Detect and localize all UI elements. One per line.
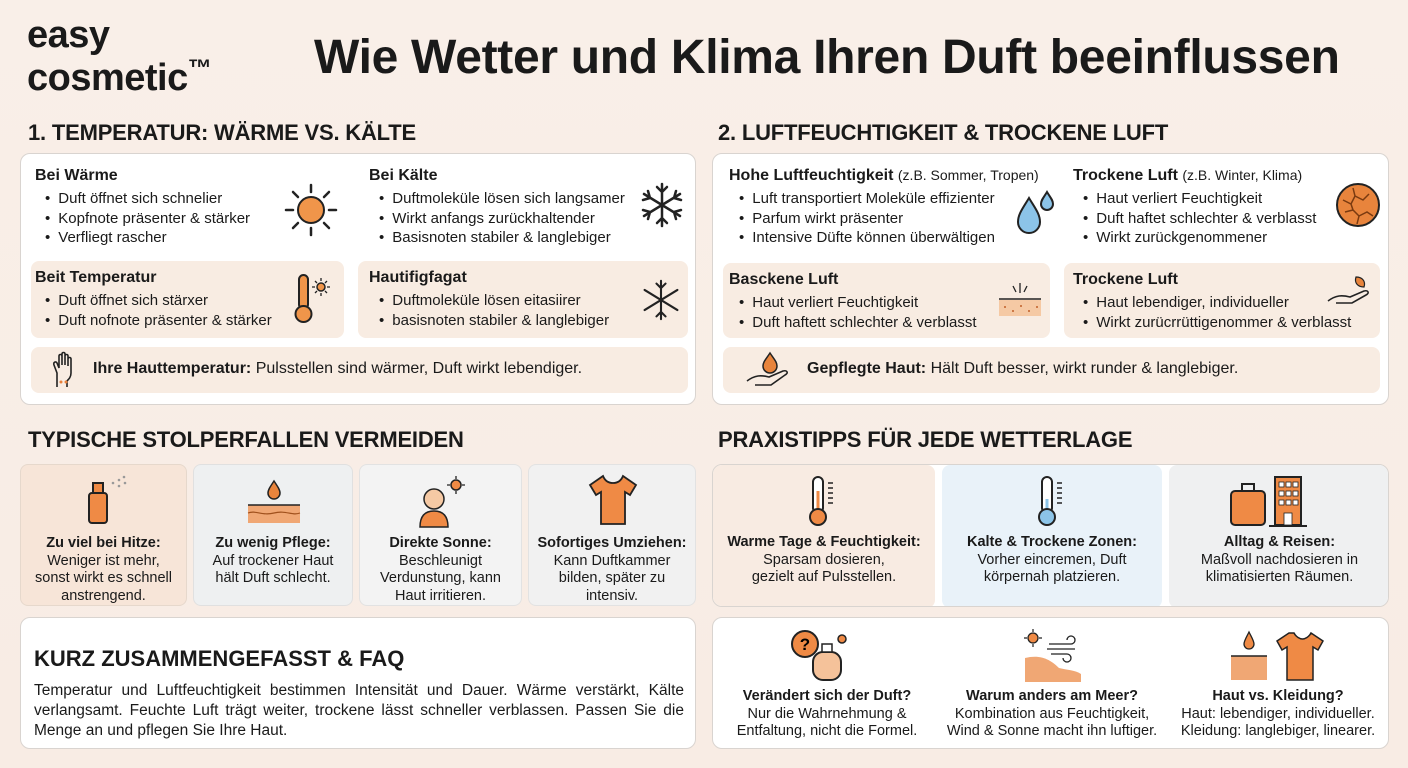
icon: spray: [88, 476, 126, 524]
faq: haut kleidung: Haut vs. Kleidung?: [1212, 688, 1344, 704]
faq: haut kleidung: Kleidung: langlebiger, linearer.: [1181, 723, 1375, 739]
card: kalte zonen: Vorher eincremen, Duft: [977, 552, 1127, 568]
faq: haut kleidung: [1181, 630, 1375, 739]
text: bei kälte: [369, 167, 625, 246]
card: alltag: Maßvoll nachdosieren in: [1201, 552, 1358, 568]
heading: luftfeuchtigkeit: 2. LUFTFEUCHTIGKEIT & TROCKENE LUFT: [718, 120, 1168, 145]
text: bei kälte: Basisnoten stabiler & langlebiger: [392, 229, 611, 246]
title: Wie Wetter und Klima Ihren Duft beeinflussen: [314, 31, 1340, 84]
panel: luftfeuchtigkeit: [712, 153, 1389, 405]
sub: basckene luft: Haut verliert Feuchtigkeit: [752, 294, 918, 311]
card: umziehen: bilden, später zu: [559, 570, 665, 586]
text: bei wärme: Kopfnote präsenter & stärker: [58, 210, 250, 226]
card: kalte zonen: Kalte & Trockene Zonen:: [967, 534, 1137, 550]
heading: stolperfallen: TYPISCHE STOLPERFALLEN VERMEIDEN: [28, 427, 464, 452]
card: sonne: Haut irritieren.: [395, 588, 486, 604]
text: hohe luftfeuchtigkeit: Luft transportiert Moleküle effizienter: [752, 190, 995, 207]
panel: praxistipps: [712, 464, 1389, 607]
text: hohe luftfeuchtigkeit: Hohe Luftfeuchtigkeit (z.B. Sommer, Tropen): [729, 167, 1039, 184]
card: sonne: Beschleunigt: [399, 552, 482, 568]
icon: sun: [284, 184, 338, 236]
sub: trockene luft 2: [1064, 263, 1380, 338]
card: kalte zonen: körpernah platzieren.: [984, 569, 1120, 585]
text: summary: Temperatur und Luftfeuchtigkeit bestimmen Intensität und Dauer. Wärme verstärkt, Kälte verlangsamt. Feuchte Luft trägt weiter, trockene lässt schneller verblassen. Passen Sie die Menge an und pflegen Sie Ihre Haut.: [34, 682, 684, 739]
card: hitze: [20, 464, 187, 606]
text: hohe luftfeuchtigkeit: Parfum wirkt präsenter: [752, 210, 903, 226]
card: kalte zonen: [942, 465, 1162, 608]
icon: shirt: [588, 474, 638, 525]
card: sonne: Direkte Sonne:: [389, 535, 492, 551]
card: warme tage: gezielt auf Pulsstellen.: [752, 569, 896, 585]
icon: hand drop: [746, 352, 788, 386]
text: bei wärme: [35, 167, 250, 246]
card: hitze: Weniger ist mehr,: [47, 552, 160, 568]
sub: hautifigfagat: basisnoten stabiler & langlebiger: [392, 312, 609, 328]
icon: drops: [1017, 190, 1054, 234]
panel: faq text: [20, 617, 696, 749]
text: bei kälte: Duftmoleküle lösen sich langsamer: [392, 190, 625, 207]
heading: temperatur: 1. TEMPERATUR: WÄRME VS. KÄLTE: [28, 120, 416, 145]
card: sonne: Verdunstung, kann: [380, 570, 501, 586]
faq: meer: [947, 629, 1157, 739]
sub: beit temperatur: Beit Temperatur: [35, 269, 157, 286]
icon: question perfume: ?: [800, 635, 810, 654]
card: umziehen: intensiv.: [586, 588, 638, 604]
icon: snowflake: [644, 280, 678, 320]
heading: praxistipps: PRAXISTIPPS FÜR JEDE WETTERLAGE: [718, 427, 1132, 452]
text: hohe luftfeuchtigkeit: [729, 167, 1039, 246]
card: umziehen: Kann Duftkammer: [554, 552, 670, 568]
callout: hauttemperatur: Ihre Hauttemperatur: Pulsstellen sind wärmer, Duft wirkt lebendiger.: [93, 360, 582, 377]
text: bei kälte: Bei Kälte: [369, 167, 437, 184]
card: umziehen: [528, 464, 696, 606]
panel: stolperfallen: [20, 464, 696, 606]
callout: gepflegte haut: [723, 347, 1380, 393]
sub: basckene luft: Basckene Luft: [729, 271, 838, 288]
faq: duft: Entfaltung, nicht die Formel.: [737, 723, 917, 739]
sub: hautifigfagat: Duftmoleküle lösen eitasiirer: [392, 292, 581, 309]
sub: beit temperatur: [31, 261, 344, 338]
card: hitze: sonst wirkt es schnell: [35, 570, 172, 586]
sub: trockene luft 2: Wirkt zurücrrüttigenommer & verblasst: [1096, 314, 1351, 330]
icon: skin: [999, 283, 1041, 316]
text: hohe luftfeuchtigkeit: Intensive Düfte können überwältigen: [752, 229, 995, 246]
icon: hand: [52, 352, 72, 387]
icon: dry earth: [1336, 183, 1380, 227]
text: bei wärme: Bei Wärme: [35, 167, 118, 184]
text: bei kälte: Wirkt anfangs zurückhaltender: [392, 210, 595, 226]
icon: hand leaf: [1328, 276, 1369, 304]
icon: question perfume: [791, 630, 847, 681]
faq: duft: Verändert sich der Duft?: [743, 688, 911, 704]
text: trockene luft: Haut verliert Feuchtigkeit: [1096, 190, 1262, 207]
card: umziehen: Sofortiges Umziehen:: [537, 535, 687, 551]
card: hitze: Zu viel bei Hitze:: [46, 535, 161, 551]
faq: meer: Warum anders am Meer?: [966, 688, 1138, 704]
faq: meer: Kombination aus Feuchtigkeit,: [955, 706, 1149, 722]
callout: hauttemperatur: [31, 347, 688, 393]
logo: [27, 14, 211, 99]
card: sonne: [359, 464, 522, 606]
faq: duft: Nur die Wahrnehmung &: [747, 706, 907, 722]
sub: trockene luft 2: Trockene Luft: [1073, 271, 1178, 288]
sub: beit temperatur: Duft nofnote präsenter & stärker: [58, 312, 272, 328]
card: alltag: [1169, 465, 1390, 608]
sub: hautifigfagat: Hautifigfagat: [369, 269, 467, 286]
icon: beach wind: [1024, 629, 1081, 682]
sub: basckene luft: Duft haftett schlechter & verblasst: [752, 314, 977, 330]
card: pflege: Zu wenig Pflege:: [215, 535, 331, 551]
heading: kurz zusammengefasst: KURZ ZUSAMMENGEFASST & FAQ: [34, 646, 404, 671]
icon: skin shirt: [1231, 630, 1324, 681]
text: trockene luft: Duft haftet schlechter & verblasst: [1096, 210, 1316, 226]
faq: haut kleidung: Haut: lebendiger, individueller.: [1181, 706, 1375, 722]
icon: thermometer warm: [809, 476, 833, 526]
text: trockene luft: Trockene Luft (z.B. Winter, Klima): [1073, 167, 1302, 184]
panel: faq icons: [712, 617, 1389, 749]
card: pflege: Auf trockener Haut: [213, 552, 333, 568]
card: warme tage: [713, 465, 935, 608]
logo: easy: [27, 14, 110, 56]
text: bei wärme: Duft öffnet sich schnelier: [58, 190, 222, 207]
icon: person sun: [419, 476, 465, 528]
text: trockene luft: Wirkt zurückgenommener: [1096, 229, 1267, 246]
text: bei wärme: Verfliegt rascher: [58, 229, 167, 246]
faq: duft: [737, 630, 917, 739]
sub: hautifigfagat: [358, 261, 688, 338]
card: warme tage: Sparsam dosieren,: [763, 552, 885, 568]
sub: beit temperatur: Duft öffnet sich stärxer: [58, 292, 208, 309]
icon: thermometer: [294, 274, 330, 323]
card: pflege: hält Duft schlecht.: [215, 570, 331, 586]
logo: cosmetic™: [27, 55, 211, 99]
sub: basckene luft: [723, 263, 1050, 338]
callout: gepflegte haut: Gepflegte Haut: Hält Duft besser, wirkt runder & langlebiger.: [807, 360, 1238, 377]
card: pflege: [193, 464, 353, 606]
icon: snowflake: [642, 182, 682, 228]
card: alltag: Alltag & Reisen:: [1224, 534, 1335, 550]
icon: thermometer cold: [1038, 476, 1062, 526]
icon: suitcase building: [1230, 476, 1307, 527]
sub: trockene luft 2: Haut lebendiger, individueller: [1096, 294, 1289, 311]
text: trockene luft: [1073, 167, 1316, 246]
faq: meer: Wind & Sonne macht ihn luftiger.: [947, 723, 1157, 739]
card: hitze: anstrengend.: [61, 588, 146, 604]
icon: dry skin drop: [248, 480, 300, 523]
card: warme tage: Warme Tage & Feuchtigkeit:: [727, 534, 921, 550]
card: alltag: klimatisierten Räumen.: [1206, 569, 1353, 585]
panel: temperatur: [20, 153, 696, 405]
